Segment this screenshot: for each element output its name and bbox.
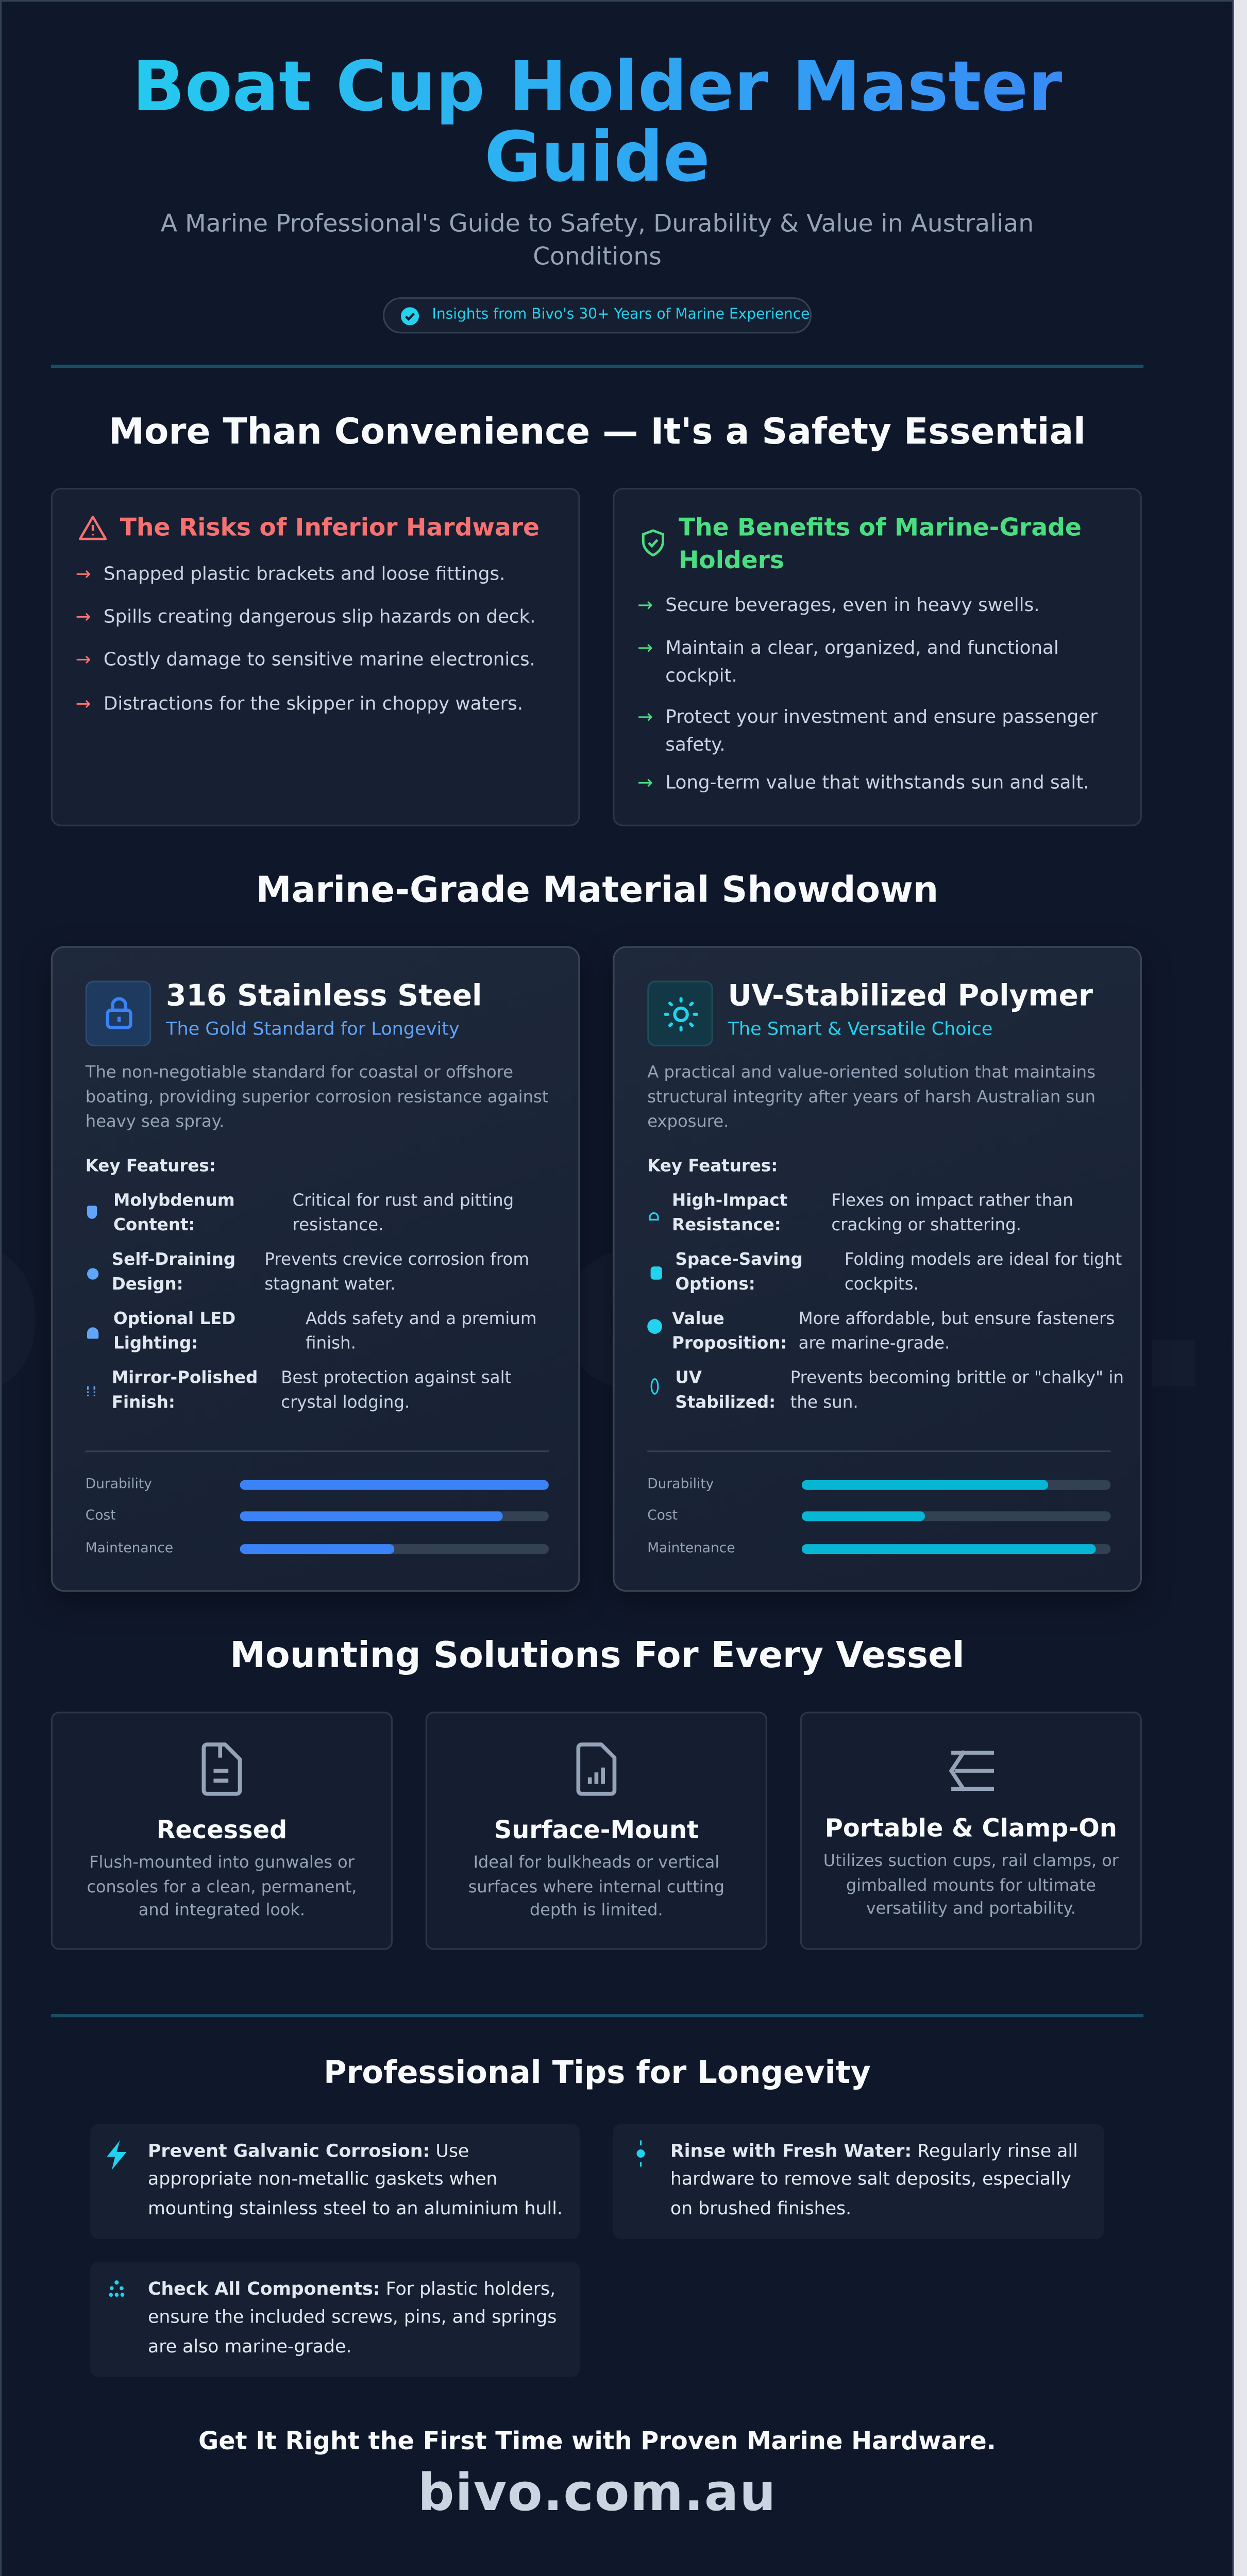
badge: Insights from Bivo's 30+ Years of Marine Experience: [432, 307, 810, 324]
key features: More affordable, but ensure fasteners are marine-grade.: [799, 1311, 1115, 1353]
icon: warning: [79, 514, 107, 540]
ratings: Maintenance: [647, 1539, 735, 1555]
footer tagline: Get It Right the First Time with Proven Marine Hardware.: [198, 2426, 996, 2456]
card: surface mount: Surface-Mount: [494, 1815, 699, 1845]
icon: sun: [647, 980, 713, 1046]
ratings: Cost: [86, 1506, 116, 1523]
icon: lines: [945, 1744, 997, 1797]
panel: risks: →: [76, 649, 91, 670]
title: UV-Stabilized Polymer: [728, 979, 1093, 1013]
list: Long-term value that withstands sun and salt.: [665, 772, 1089, 793]
card: stainless steel: The Gold Standard for Longevity: [166, 1019, 460, 1040]
title: 316 Stainless Steel: [166, 979, 482, 1013]
key features: Best protection against salt crystal lodging.: [281, 1370, 511, 1412]
tip: galvanic: [90, 2124, 580, 2239]
key features: Prevents becoming brittle or "chalky" in the sun.: [790, 1370, 1124, 1412]
key features: Molybdenum: [113, 1193, 235, 1211]
icon: bolt: [107, 2140, 127, 2170]
ratings: Durability: [86, 1475, 152, 1492]
key features: High-Impact: [672, 1193, 787, 1211]
heading: materials: Marine-Grade Material Showdown: [256, 871, 938, 912]
tip: components: [90, 2262, 580, 2377]
key features: Self-Draining: [112, 1252, 235, 1270]
list: Distractions for the skipper in choppy waters.: [104, 693, 523, 715]
ratings: Cost: [647, 1506, 678, 1523]
key features: Resistance:: [672, 1216, 781, 1234]
list: Spills creating dangerous slip hazards on deck.: [104, 606, 536, 628]
key features: Key Features:: [647, 1158, 778, 1176]
icon: document: [199, 1741, 245, 1797]
list: [104, 560, 564, 807]
ratings: Durability: [647, 1475, 714, 1492]
title: Boat Cup Holder Master Guide: [132, 46, 1062, 197]
panel: benefits: →: [637, 772, 653, 793]
icon: check: [401, 307, 419, 325]
list: Protect your investment and ensure passenger safety.: [665, 706, 1098, 756]
card: portable: [800, 1711, 1142, 1950]
key features: Adds safety and a premium finish.: [306, 1311, 537, 1353]
key features: Prevents crevice corrosion from stagnant water.: [264, 1252, 529, 1294]
key features: Value: [672, 1311, 724, 1329]
list: Costly damage to sensitive marine electronics.: [104, 649, 535, 670]
panel: benefits: →: [637, 595, 653, 616]
panel: benefits: [613, 488, 1142, 826]
tip: galvanic: Prevent Galvanic Corrosion: Use appropriate non-metallic gaskets when mounting stainless steel to an aluminium hull.: [148, 2140, 563, 2218]
key features: [647, 1157, 1116, 1419]
panel: benefits: →: [637, 637, 653, 659]
heading: mounting: Mounting Solutions For Every Vessel: [230, 1636, 965, 1677]
icon: chart document: [574, 1741, 619, 1797]
subtitle: A Marine Professional's Guide to Safety, Durability & Value in Australian Conditions: [161, 210, 1034, 271]
card: stainless steel: [51, 946, 580, 1592]
icon: dots: [108, 2280, 125, 2298]
icon: lock: [86, 980, 151, 1046]
card: recessed: [51, 1711, 393, 1950]
panel: risks: →: [76, 564, 91, 585]
card: polymer: The Smart & Versatile Choice: [728, 1019, 992, 1040]
key features: Mirror-Polished: [112, 1370, 258, 1388]
heading: tips: Professional Tips for Longevity: [324, 2055, 871, 2091]
card: portable: Utilizes suction cups, rail clamps, or gimballed mounts for ultimate versatility and portability.: [823, 1853, 1119, 1919]
key features: Key Features:: [86, 1158, 216, 1176]
heading: The Benefits of Marine-Grade Holders: [679, 514, 1082, 575]
key features: Proposition:: [672, 1335, 787, 1353]
footer url: bivo.com.au: [418, 2464, 777, 2523]
panel: risks: →: [76, 606, 91, 628]
ratings: [86, 1475, 549, 1557]
key features: Critical for rust and pitting resistance.: [293, 1193, 514, 1234]
description: A practical and value-oriented solution that maintains structural integrity after years of harsh Australian sun exposure.: [647, 1064, 1096, 1132]
key features: Optional LED: [113, 1311, 235, 1329]
key features: [86, 1157, 553, 1419]
key features: UV: [675, 1370, 702, 1388]
key features: Lighting:: [113, 1335, 198, 1353]
panel: risks: [51, 488, 580, 826]
key features: Finish:: [112, 1394, 175, 1412]
card: recessed: Flush-mounted into gunwales or consoles for a clean, permanent, and integrated look.: [87, 1855, 357, 1920]
card: polymer: [613, 946, 1142, 1592]
panel: benefits: →: [637, 706, 653, 727]
list: Maintain a clear, organized, and functional cockpit.: [665, 637, 1059, 687]
badge: [383, 297, 812, 333]
description: The non-negotiable standard for coastal or offshore boating, providing superior corrosion resistance against heavy sea spray.: [86, 1064, 548, 1132]
heading: safety: More Than Convenience — It's a Safety Essential: [109, 412, 1086, 453]
tip: rinse: [613, 2124, 1104, 2239]
key features: Space-Saving: [675, 1252, 803, 1270]
panel: risks: →: [76, 693, 91, 715]
list: Snapped plastic brackets and loose fittings.: [104, 564, 505, 585]
card: surface mount: [426, 1711, 767, 1950]
key features: Stabilized:: [675, 1394, 776, 1412]
ratings: [647, 1475, 1110, 1557]
tip: rinse: Rinse with Fresh Water: Regularly rinse all hardware to remove salt deposits, especially on brushed finishes.: [670, 2140, 1078, 2218]
key features: Design:: [112, 1276, 183, 1294]
key features: Flexes on impact rather than cracking or shattering.: [831, 1193, 1073, 1234]
icon: shield: [641, 529, 665, 557]
tip: components: Check All Components: For plastic holders, ensure the included screws, pins, and springs are also marine-grade.: [148, 2278, 557, 2357]
icon: drop: [636, 2140, 646, 2167]
card: portable: Portable & Clamp-On: [825, 1814, 1117, 1843]
key features: Folding models are ideal for tight cockpits.: [845, 1252, 1122, 1294]
key features: Content:: [113, 1216, 195, 1234]
heading: The Risks of Inferior Hardware: [120, 514, 540, 542]
card: recessed: Recessed: [157, 1815, 287, 1845]
list: [665, 591, 1134, 805]
key features: Options:: [675, 1276, 755, 1294]
ratings: Maintenance: [86, 1539, 173, 1555]
card: surface mount: Ideal for bulkheads or vertical surfaces where internal cutting depth is limited.: [468, 1855, 724, 1920]
list: Secure beverages, even in heavy swells.: [665, 595, 1040, 616]
